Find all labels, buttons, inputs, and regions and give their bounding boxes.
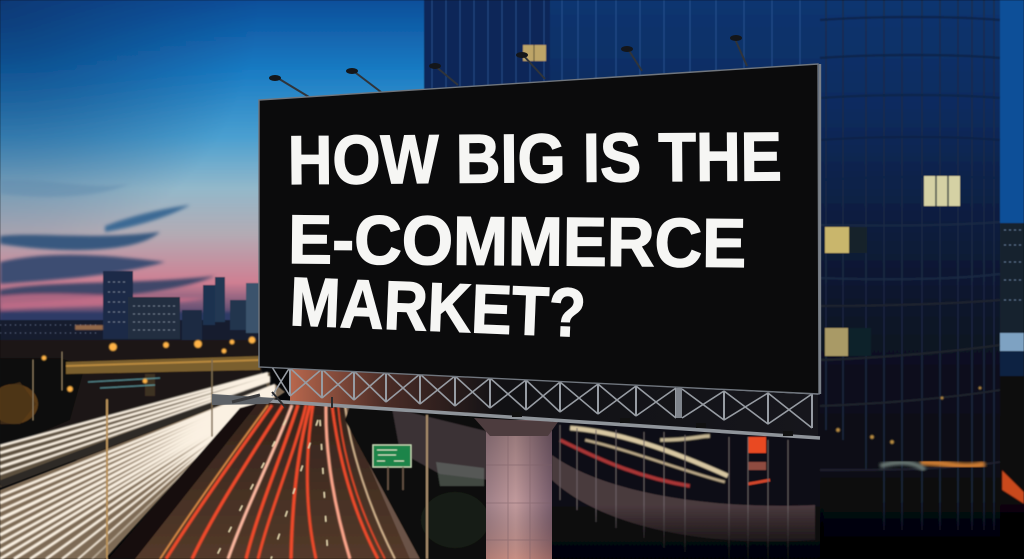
glass tower [424,0,1024,559]
evening sky [0,0,1024,325]
clouds [0,180,260,325]
lower curved facade with road reflections [550,385,1024,559]
overpass bridge [66,356,260,396]
highway: white traffic trails [0,372,285,559]
billboard support pillar [474,418,558,559]
lower garden and green road sign [345,405,500,559]
city skyline [0,271,262,365]
billboard lamps [269,35,747,97]
billboard panel [259,64,820,394]
billboard headline: MARKET? [288,263,587,352]
highway: red tail-light lanes [108,403,420,559]
left light poles [33,352,212,559]
billboard headline: HOW BIG IS THE [288,118,782,199]
street lights glow [42,336,256,392]
billboard headline: E-COMMERCE [288,201,747,282]
billboard truss [212,366,820,438]
ground and dark trees [0,340,262,460]
billboard headline [288,118,782,352]
